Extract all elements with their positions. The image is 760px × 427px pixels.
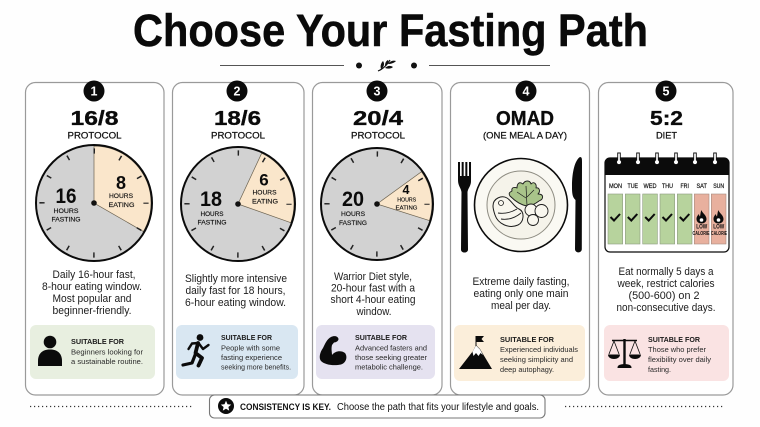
heading: 18/6: 18/6 (214, 107, 261, 130)
clock: 18 hours fasting, 6 hours eating: 6 (259, 171, 269, 190)
callout: consistency is key (210, 395, 545, 418)
icon: person (38, 336, 62, 366)
suitable for box (316, 325, 435, 379)
suitable for box: seeking more benefits. (221, 362, 291, 372)
suitable for box: fasting experience (221, 353, 282, 362)
clock: 16 hours fasting, 8 hours eating: HOURS (109, 193, 133, 200)
description (472, 276, 570, 312)
description: (500-600) on 2 (628, 290, 700, 302)
badge 3 (366, 80, 388, 102)
suitable for box: SUITABLE FOR (500, 335, 555, 344)
day labels: WED (644, 184, 657, 190)
icon: mountain with flag (459, 336, 492, 369)
suitable for box: Beginners looking for (71, 348, 144, 356)
subheading: protocol: PROTOCOL (211, 130, 266, 142)
clock: 16 hours fasting, 8 hours eating (36, 145, 152, 261)
clock: 20 hours fasting, 4 hours eating: HOURS (341, 211, 365, 218)
suitable for box: SUITABLE FOR (648, 335, 701, 344)
suitable for box: SUITABLE FOR (355, 333, 408, 342)
suitable for box: a sustainable routine. (71, 357, 143, 366)
description (330, 271, 416, 318)
subheading: one meal a day: (ONE MEAL A DAY) (483, 130, 567, 142)
binder rings (616, 153, 718, 165)
description (616, 266, 716, 314)
description: 20-hour fast with a (331, 282, 416, 294)
clock: 20 hours fasting, 4 hours eating: HOURS (397, 198, 416, 204)
description: short 4-hour eating (330, 294, 416, 306)
description: beginner-friendly. (52, 305, 132, 317)
suitable for box: Experienced individuals (500, 345, 578, 354)
tomatoes (525, 204, 537, 216)
suitable for box: Advanced fasters and (355, 344, 427, 352)
clock: 18 hours fasting, 6 hours eating: HOURS (252, 190, 277, 196)
icon: runner (183, 334, 208, 366)
suitable for box: metabolic challenge. (355, 362, 423, 372)
suitable for box: SUITABLE FOR (221, 333, 273, 342)
clock: 20 hours fasting, 4 hours eating: 4 (403, 183, 410, 197)
leafy greens (509, 181, 543, 206)
suitable for box: People with some (221, 344, 280, 352)
subheading: diet: DIET (656, 130, 677, 142)
description: 8-hour eating window. (42, 281, 142, 293)
description: Eat normally 5 days a (618, 266, 714, 278)
day labels: TUE (628, 184, 638, 190)
badge 2 (226, 80, 248, 102)
clock: 16 hours fasting, 8 hours eating: EATING (108, 202, 134, 209)
description: non-consecutive days. (616, 302, 716, 314)
panel: 16/8 protocol (26, 80, 164, 395)
suitable for box (454, 325, 585, 381)
day labels: MON (609, 184, 622, 190)
heading: 5:2: 5:2 (650, 107, 683, 130)
callout: consistency is key: CONSISTENCY IS KEY. (240, 402, 331, 413)
description: meal per day. (491, 300, 551, 312)
meat slice (493, 197, 523, 226)
title divider with sprig (220, 60, 550, 71)
clock: 18 hours fasting, 6 hours eating (181, 147, 295, 261)
description (42, 269, 142, 317)
low calorie days: LOW (713, 224, 724, 230)
badge 5 (656, 80, 676, 102)
panel: 5:2 diet (598, 80, 733, 395)
badge 4 (516, 80, 536, 102)
description: 6-hour eating window. (185, 297, 286, 309)
low calorie days: CALORIE (711, 231, 727, 237)
day labels (609, 184, 724, 190)
clock: 16 hours fasting, 8 hours eating: 8 (116, 173, 126, 193)
suitable for box: seeking simplicity and (500, 355, 573, 364)
description (185, 273, 287, 309)
subheading: protocol: PROTOCOL (351, 130, 406, 142)
badge 1 (84, 80, 104, 102)
description: window. (356, 306, 392, 318)
icon: balance scale (608, 339, 641, 368)
panel: 18/6 protocol (172, 80, 304, 395)
description: Extreme daily fasting, (472, 276, 570, 288)
icon: plate with meal (474, 158, 568, 252)
suitable for box: those seeking greater (355, 353, 428, 362)
clock: 20 hours fasting, 4 hours eating (321, 148, 433, 260)
icon: flexed arm (320, 336, 346, 365)
icon: knife (572, 157, 582, 252)
clock: 18 hours fasting, 6 hours eating: FASTING (198, 220, 226, 226)
icon: weekly calendar (605, 153, 729, 252)
low calorie days (692, 194, 727, 244)
clock: 20 hours fasting, 4 hours eating: 20 (342, 188, 364, 211)
suitable for box: flexibility over daily (648, 355, 711, 364)
suitable for box (176, 325, 298, 379)
heading: 16/8: 16/8 (70, 107, 118, 130)
title: Choose Your Fasting Path (133, 5, 648, 56)
description: Daily 16-hour fast, (52, 269, 136, 281)
description: daily fast for 18 hours, (186, 285, 286, 297)
day labels: THU (662, 184, 673, 190)
heading: OMAD: OMAD (496, 107, 554, 130)
eating days (608, 194, 692, 244)
footer dotted rule right (565, 406, 723, 408)
panel: 20/4 protocol (312, 80, 442, 395)
description: Slightly more intensive (185, 273, 287, 285)
suitable for box (604, 325, 729, 381)
description: eating only one main (474, 288, 568, 300)
suitable for box: deep autophagy. (500, 365, 554, 374)
day labels: SUN (713, 184, 724, 190)
badge 5: 5 (663, 84, 670, 98)
badge 2: 2 (234, 84, 241, 98)
suitable for box: SUITABLE FOR (71, 337, 125, 346)
description: Warrior Diet style, (334, 271, 412, 283)
subheading: protocol: PROTOCOL (68, 130, 122, 142)
panel: OMAD (450, 80, 590, 395)
heading: 20/4: 20/4 (353, 107, 404, 130)
low calorie days: LOW (696, 224, 707, 230)
icon: fork (458, 162, 471, 252)
low calorie days: CALORIE (692, 231, 710, 237)
icon: star badge (218, 398, 234, 414)
callout: consistency is key: Choose the path that fits your lifestyle and goals. (337, 402, 539, 413)
clock: 20 hours fasting, 4 hours eating: FASTING (339, 220, 367, 227)
badge 3: 3 (374, 84, 381, 98)
description: Most popular and (52, 293, 132, 305)
clock: 18 hours fasting, 6 hours eating: 18 (200, 188, 222, 211)
suitable for box: Those who prefer (648, 345, 707, 354)
clock: 18 hours fasting, 6 hours eating: EATING (252, 198, 278, 206)
day labels: SAT (696, 184, 707, 190)
footer dotted rule left (30, 406, 192, 408)
badge 1: 1 (91, 84, 98, 98)
clock: 16 hours fasting, 8 hours eating: 16 (56, 185, 76, 208)
clock: 18 hours fasting, 6 hours eating: HOURS (200, 211, 224, 218)
badge 4: 4 (523, 84, 530, 98)
clock: 16 hours fasting, 8 hours eating: HOURS (54, 208, 79, 215)
suitable for box (30, 325, 155, 379)
day labels: FRI (680, 184, 689, 190)
description: week, restrict calories (617, 278, 715, 290)
suitable for box: fasting. (648, 365, 671, 374)
clock: 16 hours fasting, 8 hours eating: FASTING (52, 216, 80, 224)
clock: 20 hours fasting, 4 hours eating: EATING (396, 206, 418, 212)
